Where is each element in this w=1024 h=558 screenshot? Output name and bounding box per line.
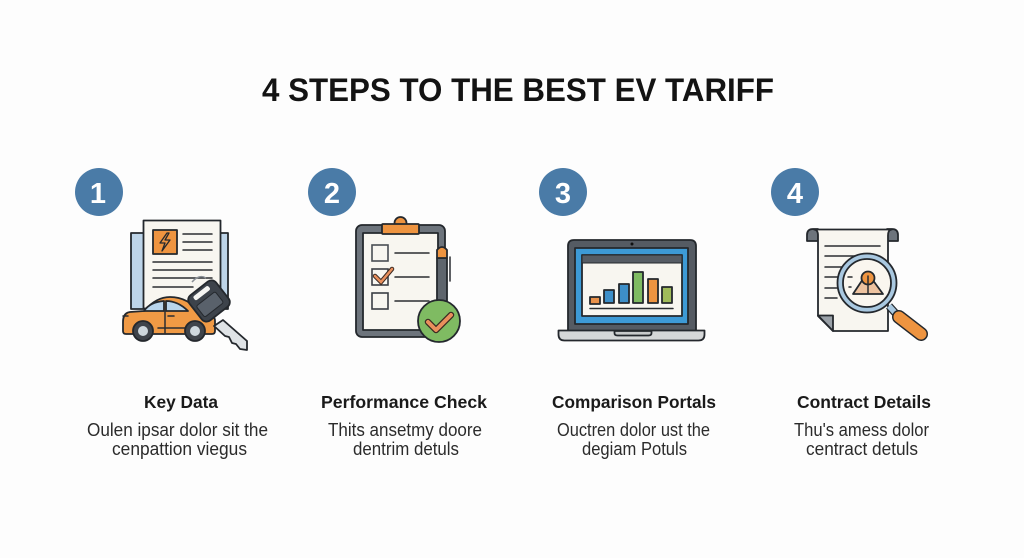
icon: document, car and key	[123, 220, 247, 350]
bar chart	[590, 272, 673, 308]
number badge 2	[308, 168, 356, 216]
panel: step 1 key data	[75, 168, 268, 459]
description: contract details	[794, 420, 929, 459]
icon: contract with magnifier	[807, 229, 921, 334]
title: 4 STEPS TO THE BEST EV TARIFF	[262, 72, 774, 108]
description: contract details: centract detuls	[806, 439, 918, 459]
description: key data	[87, 420, 268, 459]
heading: performance check: Performance Check	[321, 392, 487, 412]
description: comparison portals: degiam Potuls	[582, 439, 687, 459]
description: performance check: Thits ansetmy doore	[328, 420, 482, 440]
description: contract details: Thu's amess dolor	[794, 420, 929, 440]
number badge 3	[539, 168, 587, 216]
description: performance check: dentrim detuls	[353, 439, 459, 459]
panel: step 2 performance check	[308, 168, 487, 459]
description: comparison portals	[557, 420, 710, 459]
number badge 1	[75, 168, 123, 216]
number badge 2: 2	[324, 178, 340, 210]
heading: key data: Key Data	[144, 392, 218, 412]
heading: comparison portals: Comparison Portals	[552, 392, 716, 412]
description: comparison portals: Ouctren dolor ust the	[557, 420, 710, 440]
number badge 1: 1	[90, 178, 106, 210]
description: key data: cenpattion viegus	[112, 439, 247, 459]
number badge 4: 4	[787, 178, 803, 210]
description: key data: Oulen ipsar dolor sit the	[87, 420, 268, 440]
icon: laptop with bar chart	[558, 240, 704, 340]
description: performance check	[328, 420, 482, 459]
heading: contract details: Contract Details	[797, 392, 931, 412]
number badge 4	[771, 168, 819, 216]
icon: clipboard with check	[356, 217, 460, 342]
number badge 3: 3	[555, 178, 571, 210]
panel: step 4 contract details	[771, 168, 931, 459]
panel: step 3 comparison portals	[539, 168, 716, 459]
